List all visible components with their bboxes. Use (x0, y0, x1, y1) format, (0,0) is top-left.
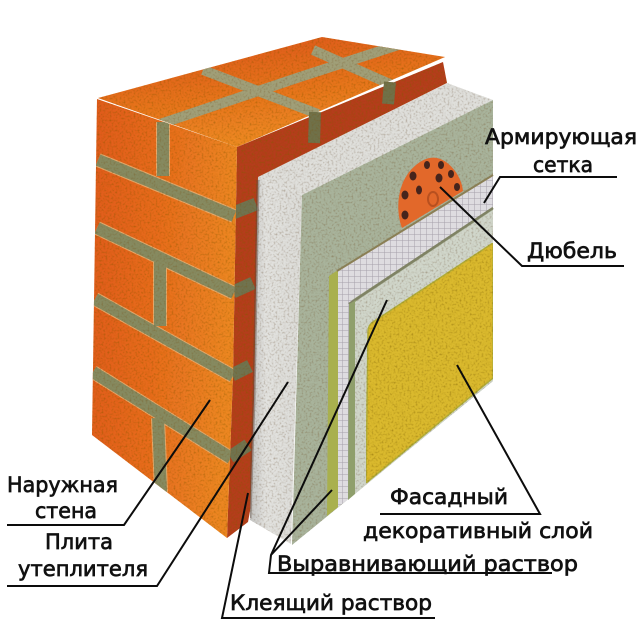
wall: red side face (227, 62, 447, 538)
reinforcing mesh layer (327, 175, 493, 516)
label: reinforcing mesh (484, 125, 637, 203)
wall: front face with mortar joints (92, 99, 237, 538)
wall: top face (98, 37, 445, 147)
label: leveling mortar (269, 300, 578, 577)
decorative facade layer (366, 243, 493, 483)
brick wall (92, 37, 447, 538)
label: outer wall: стена (35, 499, 97, 524)
label: reinforcing mesh: сетка (533, 153, 593, 178)
label: dowel (440, 187, 624, 266)
mesh: grid (338, 175, 493, 507)
label: adhesive mortar: Клеящий раствор (230, 591, 432, 616)
mesh: yellow-green edge strip (327, 270, 338, 516)
label: decorative facade layer (363, 365, 593, 544)
label: outer wall: Наружная (7, 473, 118, 498)
insulation board (250, 83, 493, 544)
insulation: top face (258, 83, 493, 195)
leveling mortar layer (355, 210, 493, 494)
mesh: green edge strip (348, 300, 356, 500)
label: dowel: Дюбель (527, 239, 617, 264)
label: decorative facade layer: Фасадный (390, 485, 508, 510)
icon: dowel (398, 158, 463, 228)
adhesive mortar layer (292, 100, 493, 545)
label: adhesive mortar (222, 493, 435, 618)
label: insulation board (7, 382, 288, 586)
label: outer wall (7, 400, 210, 525)
label: leveling mortar: Выравнивающий раствор (277, 552, 578, 577)
insulation: side face (250, 177, 302, 544)
label: reinforcing mesh: Армирующая (485, 125, 637, 150)
label: insulation board: Плита (45, 530, 113, 555)
label: decorative facade layer: декоративный слой (363, 519, 593, 544)
label: insulation board: утеплителя (18, 557, 148, 582)
